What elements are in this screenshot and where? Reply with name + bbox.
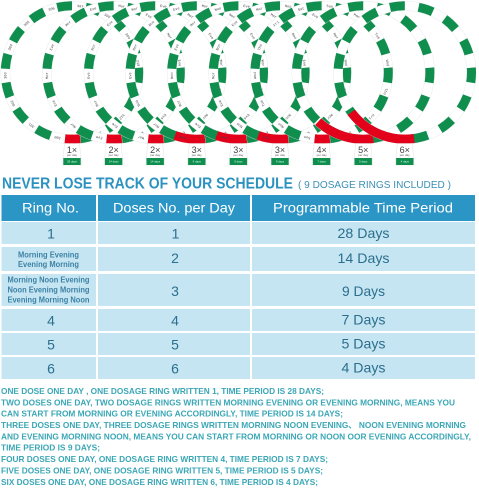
title: NEVER LOSE TRACK OF YOUR SCHEDULE — [2, 176, 293, 192]
ring 2: twice per day, morning evening: Eve Mor Eve Mor Eve Mor Eve Mor Eve Mor Eve Mor Eve Mor — [46, 4, 181, 140]
ring 4: three times per day: 9 days — [193, 160, 202, 164]
row 1: 1 — [172, 226, 180, 242]
ring 1: once per day: 300 301 302 303 304 305 306 307 308 309 310 311 312 313 — [4, 4, 140, 140]
row 2: 14 Days — [338, 250, 390, 266]
ring 1: once per day: per day — [67, 153, 77, 157]
ring 3: twice per day, evening morning: per day — [150, 153, 161, 157]
explanatory notes: TIME PERIOD IS 9 DAYS; — [1, 443, 100, 453]
ring 8: five times per day: 5× — [358, 145, 368, 155]
ring 1: once per day: 1× — [67, 145, 77, 155]
row 1 — [2, 222, 475, 244]
explanatory notes — [1, 386, 471, 487]
row 3: Noon Evening Morning — [8, 284, 90, 294]
ring 8: five times per day — [278, 0, 448, 165]
title: ( 9 DOSAGE RINGS INCLUDED ) — [298, 179, 451, 191]
ring 2: twice per day, morning evening: 14 days — [109, 160, 119, 164]
row 6: 4 Days — [342, 360, 386, 376]
row 3: Morning Noon Evening — [8, 274, 90, 284]
row 3: Evening Morning Noon — [8, 294, 90, 304]
explanatory notes: THREE DOSES ONE DAY, THREE DOSAGE RINGS WRITTEN MORNING NOON EVENING、 NOON EVENING MORNING — [1, 420, 466, 430]
ring 9: six times per day: 6× — [400, 145, 410, 155]
explanatory notes: FIVE DOSES ONE DAY, ONE DOSAGE RING WRITTEN 5, TIME PERIOD IS 5 DAYS; — [1, 466, 323, 476]
explanatory notes: AND EVENING MORNING NOON, MEANS YOU CAN START FROM MORNING OR NOON OOR EVENING ACCORDINGLY, — [1, 431, 471, 441]
ring 6: three times per day: Mor Noo Eve Mor Noo Eve Mor Noo Eve Mor Noo Eve Mor Noo — [212, 4, 348, 140]
ring 4: three times per day: per day — [192, 153, 202, 157]
table header: Programmable Time Period — [273, 200, 453, 216]
row 4 — [2, 309, 475, 331]
ring 2: twice per day, morning evening: per day — [109, 153, 119, 157]
row 2: Evening Morning — [18, 259, 79, 269]
ring 5: three times per day: 3× — [233, 145, 244, 155]
table header: Ring No. — [22, 200, 79, 216]
ring 5: three times per day: Noo Eve Mor Noo Eve Mor Noo Eve Mor Noo Eve Mor Noo Eve — [170, 4, 306, 140]
ring 7: four times per day: 4× — [316, 145, 327, 155]
row 3: 3 — [171, 283, 179, 299]
ring 5: three times per day: 9 days — [234, 160, 243, 164]
row 1: 28 Days — [338, 225, 390, 241]
ring 8: five times per day: 5 days — [359, 160, 368, 164]
row 5 — [2, 333, 475, 355]
row 5: 5 Days — [342, 336, 386, 352]
ring 6: three times per day: 3× — [275, 145, 285, 155]
ring 4: three times per day: Eve Mor Noo Eve Mor Noo Eve Mor Noo Eve Mor Noo Eve Mor — [129, 4, 264, 140]
row 2 — [2, 247, 475, 271]
ring 6: three times per day: per day — [275, 153, 285, 157]
row 2: 2 — [171, 250, 179, 266]
row 4: 4 — [47, 312, 55, 328]
ring 9: six times per day — [320, 0, 479, 165]
explanatory notes: SIX DOSES ONE DAY, ONE DOSAGE RING WRITTEN 6, TIME PERIOD IS 4 DAYS; — [1, 477, 318, 487]
row 4: 4 — [171, 312, 179, 328]
ring 3: twice per day, evening morning: Mor Eve Mor Eve Mor Eve Mor Eve Mor Eve Mor Eve Mor Eve — [87, 4, 222, 140]
ring 7: four times per day: 7 days — [317, 160, 326, 164]
row 5: 5 — [171, 336, 179, 352]
explanatory notes: TWO DOSES ONE DAY, TWO DOSAGE RINGS WRITTEN MORNING EVENING OR EVENING MORNING, MEANS YOU — [1, 397, 455, 407]
row 6 — [2, 357, 475, 379]
table header — [2, 195, 475, 221]
row 2: Morning Evening — [18, 250, 79, 260]
row 6: 6 — [47, 360, 55, 376]
row 4: 7 Days — [342, 312, 386, 328]
ring 7: four times per day: Sun Mon Tue Wed Thu Fri Sat Sun Mon Tue Wed Thu Fri Sat — [253, 4, 390, 140]
ring 6: three times per day: 9 days — [276, 160, 285, 164]
ring 4: three times per day: 3× — [192, 145, 202, 155]
table header: Doses No. per Day — [113, 200, 235, 216]
explanatory notes: ONE DOSE ONE DAY , ONE DOSAGE RING WRITTEN 1, TIME PERIOD IS 28 DAYS; — [1, 386, 324, 396]
explanatory notes: FOUR DOSES ONE DAY, ONE DOSAGE RING WRITTEN 4, TIME PERIOD IS 7 DAYS; — [1, 454, 328, 464]
ring 5: three times per day: per day — [233, 153, 244, 157]
ring 7: four times per day: per day — [317, 153, 327, 157]
row 5: 5 — [47, 336, 55, 352]
ring 9: six times per day: per day — [400, 153, 410, 157]
schedule table — [2, 195, 475, 379]
ring 3: twice per day, evening morning: 2× — [150, 145, 160, 155]
row 3: 9 Days — [342, 283, 385, 299]
ring 9: six times per day: 4 days — [401, 160, 410, 164]
explanatory notes: CAN START FROM MORNING OR EVENING ACCORDINGLY, TIME PERIOD IS 14 DAYS; — [1, 409, 343, 419]
ring 1: once per day: 28 days — [67, 160, 77, 164]
ring 3: twice per day, evening morning: 14 days — [150, 160, 161, 164]
dosage rings row — [0, 1, 476, 166]
row 6: 6 — [171, 360, 179, 376]
ring 8: five times per day: per day — [358, 153, 369, 157]
row 1: 1 — [47, 226, 55, 242]
row 3 — [2, 274, 475, 306]
ring 2: twice per day, morning evening: 2× — [108, 145, 119, 155]
